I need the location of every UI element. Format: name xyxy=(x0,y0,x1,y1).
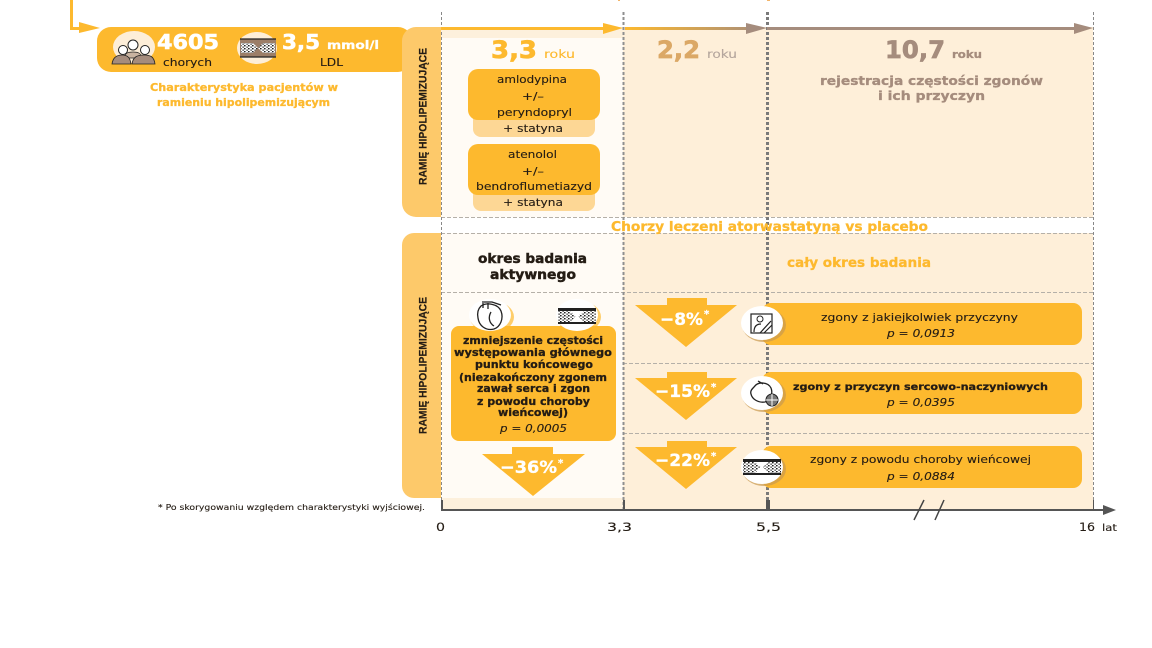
heading: active study period: okres badania xyxy=(478,252,587,267)
arrow: minus 22 percent xyxy=(635,441,737,489)
panel: all-cause mortality xyxy=(762,303,1082,345)
heading: active study period xyxy=(478,252,587,283)
text: mortality registry: i ich przyczyn xyxy=(878,89,985,103)
panel: primary endpoint: występowania głównego xyxy=(454,347,612,359)
panel: cardiovascular mortality: zgony z przyczyn sercowo-naczyniowych xyxy=(793,382,1048,393)
icon: heart xyxy=(469,299,514,333)
panel: primary endpoint: punktu końcowego xyxy=(475,359,593,371)
treatment box: amlodipine: + statyna xyxy=(503,123,563,135)
icon: patients group xyxy=(112,31,155,64)
arrow: minus 8 percent: * xyxy=(704,309,710,320)
caption: patient characteristics xyxy=(150,82,338,109)
panel: coronary mortality: p = 0,0884 xyxy=(886,471,955,483)
duration: 2,2 years: roku xyxy=(707,47,737,61)
icon: narrowed artery xyxy=(741,450,786,486)
treatment box: atenolol xyxy=(468,144,600,211)
arrow: minus 36 percent xyxy=(482,447,585,496)
arrow: minus 15 percent: −15% xyxy=(655,382,710,402)
panel: primary endpoint: wieńcowej) xyxy=(498,407,568,419)
chart axis: time in years: 3,3 xyxy=(607,520,632,534)
treatment box: amlodipine: +/– xyxy=(522,91,544,103)
panel: primary endpoint: (niezakończony zgonem xyxy=(459,372,607,384)
stat: 4605 patients xyxy=(157,30,219,69)
duration: 10,7 years: roku xyxy=(952,48,982,61)
caption: patient characteristics: Charakterystyka pacjentów w xyxy=(150,82,338,94)
panel: coronary mortality xyxy=(762,446,1082,488)
icon: heart and vessels xyxy=(741,376,786,412)
panel: all-cause mortality: zgony z jakiejkolwiek przyczyny xyxy=(821,312,1018,324)
stat: LDL 3,5 mmol/l: 3,5 xyxy=(282,30,320,54)
duration: 2,2 years xyxy=(657,36,737,64)
panel: primary endpoint xyxy=(451,326,616,441)
duration: 10,7 years: 10,7 xyxy=(885,36,945,64)
panel: side label lower arm: RAMIĘ HIPOLIPEMIZUJĄCE xyxy=(418,297,430,434)
arrow: timeline xyxy=(441,23,1093,34)
arrow: minus 8 percent xyxy=(635,298,737,347)
arrow: entry into patient characteristics xyxy=(70,0,100,33)
panel: side label upper arm: RAMIĘ HIPOLIPEMIZUJĄCE xyxy=(418,48,430,185)
panel: primary endpoint: zawał serca i zgon xyxy=(477,383,590,395)
icon: artery xyxy=(556,299,601,333)
duration: 3,3 years xyxy=(491,36,575,64)
duration: 2,2 years: 2,2 xyxy=(657,36,700,64)
panel: cardiovascular mortality: p = 0,0395 xyxy=(886,397,955,409)
treatment box: atenolol: +/– xyxy=(522,166,544,178)
arrow: minus 22 percent: −22% xyxy=(655,451,710,471)
stat: LDL 3,5 mmol/l: LDL xyxy=(320,57,343,69)
stat: LDL 3,5 mmol/l: mmol/l xyxy=(327,38,379,52)
panel: side label upper arm xyxy=(402,27,441,217)
panel: cardiovascular mortality xyxy=(762,372,1082,414)
arrow: minus 8 percent: −8% xyxy=(660,310,703,330)
chart axis: time in years: 0 xyxy=(436,520,445,534)
panel: primary endpoint: p = 0,0005 xyxy=(499,423,567,435)
treatment box: atenolol: + statyna xyxy=(503,197,563,209)
stat: 4605 patients: 4605 xyxy=(157,30,219,54)
chart axis: time in years xyxy=(436,500,1117,534)
arrow: minus 15 percent: * xyxy=(711,382,717,393)
stat: 4605 patients: chorych xyxy=(163,57,212,69)
text: mortality registry xyxy=(820,74,1043,103)
heading: active study period: aktywnego xyxy=(490,268,576,283)
arrow: minus 36 percent: * xyxy=(558,458,564,469)
treatment box: atenolol: atenolol xyxy=(508,149,557,161)
arrow: minus 22 percent: * xyxy=(711,451,717,462)
text: mortality registry: rejestracja częstości zgonów xyxy=(820,74,1043,88)
duration: 10,7 years xyxy=(885,36,982,64)
stat: LDL 3,5 mmol/l xyxy=(282,30,379,69)
panel: side label lower arm xyxy=(402,233,441,498)
chart axis: time in years: 16 xyxy=(1079,520,1095,534)
chart axis: time in years: 5,5 xyxy=(756,520,781,534)
panel: primary endpoint: zmniejszenie częstości xyxy=(463,335,603,347)
chart axis: time in years: lat xyxy=(1102,523,1117,534)
icon: artery with LDL xyxy=(237,32,277,64)
panel: primary endpoint: z powodu choroby xyxy=(477,396,590,408)
treatment box: amlodipine: peryndopryl xyxy=(497,107,572,119)
footnote: * Po skorygowaniu względem charakterystyki wyjściowej. xyxy=(158,502,425,512)
heading: whole study period: cały okres badania xyxy=(787,256,931,271)
duration: 3,3 years: roku xyxy=(544,47,575,61)
treatment box: amlodipine: amlodypina xyxy=(497,74,567,86)
panel: coronary mortality: zgony z powodu choroby wieńcowej xyxy=(810,454,1031,466)
treatment box: amlodipine xyxy=(468,69,600,137)
duration: 3,3 years: 3,3 xyxy=(491,36,537,64)
panel: all-cause mortality: p = 0,0913 xyxy=(886,328,955,340)
background: timeline panels xyxy=(441,12,1094,510)
caption: patient characteristics: ramieniu hipolipemizującym xyxy=(157,97,330,109)
arrow: minus 15 percent xyxy=(635,372,737,420)
heading: atorvastatin vs placebo: Chorzy leczeni atorwastatyną vs placebo xyxy=(611,220,928,235)
panel: patient characteristics bar xyxy=(97,27,412,72)
treatment box: atenolol: bendroflumetiazyd xyxy=(476,181,592,193)
arrow: minus 36 percent: −36% xyxy=(500,458,557,478)
icon: death certificate xyxy=(741,306,786,342)
